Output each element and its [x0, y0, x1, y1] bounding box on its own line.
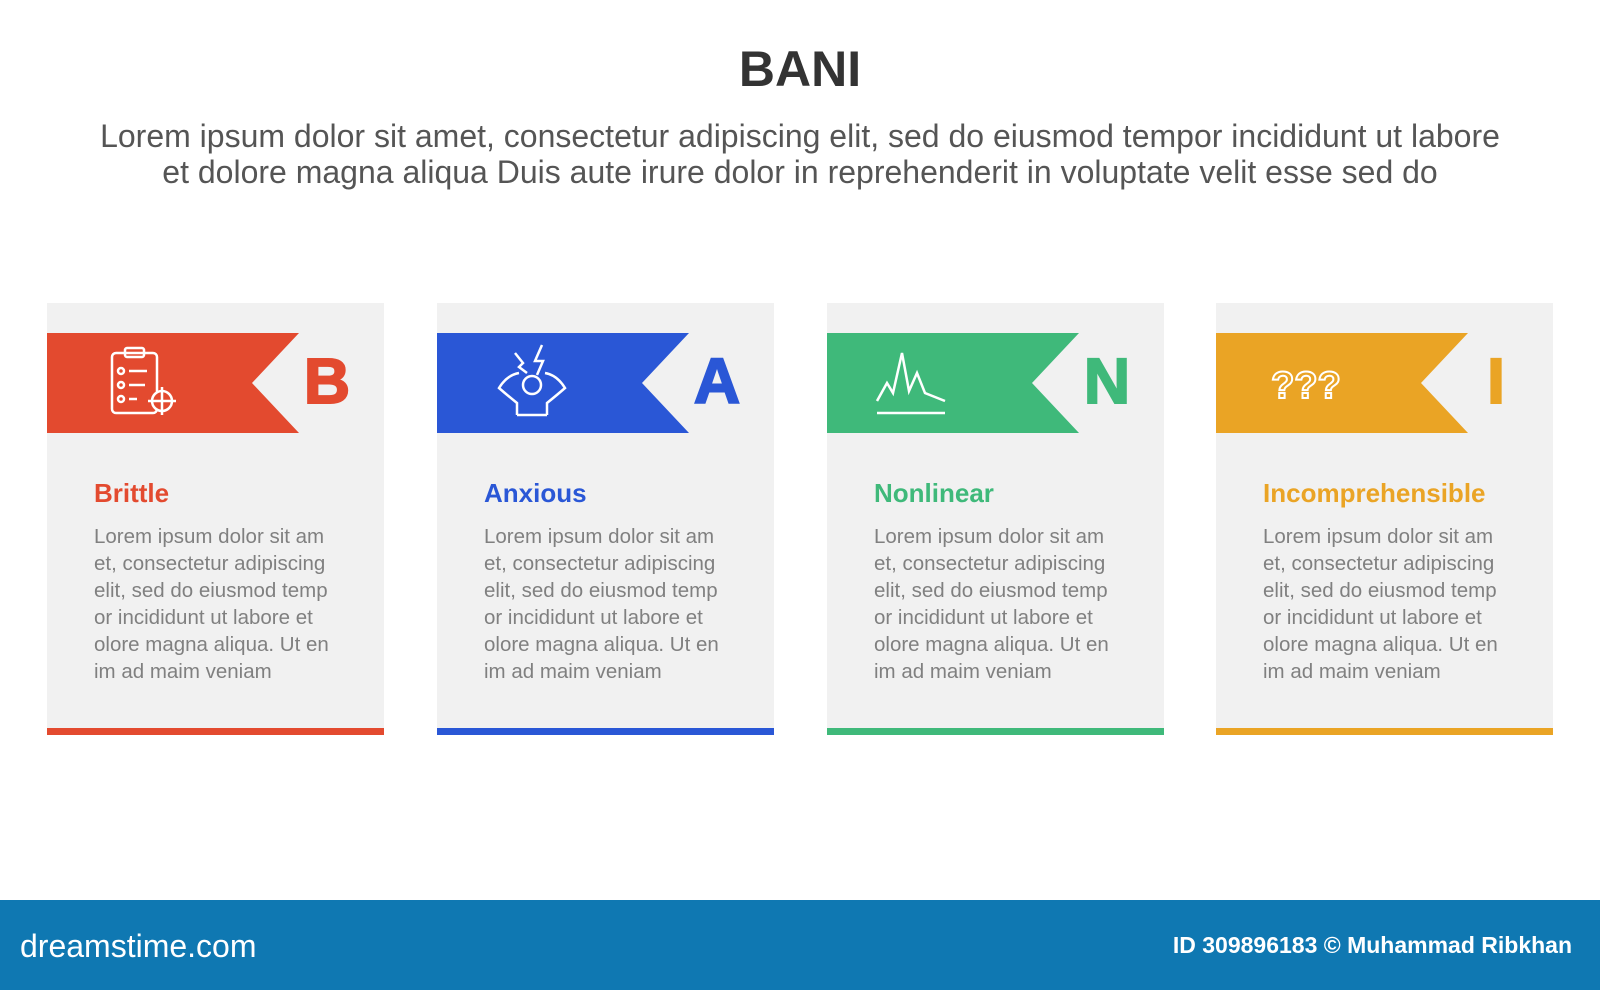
footer logo: dreamstime.com	[20, 928, 256, 964]
subtitle: Lorem ipsum dolor sit amet, consectetur adipiscing elit, sed do eiusmod tempor incididunt ut labore	[100, 118, 1500, 154]
subtitle: et dolore magna aliqua Duis aute irure dolor in reprehenderit in voluptate velit esse sed do	[162, 154, 1438, 190]
panel: incomprehensible	[1216, 303, 1553, 735]
text: elit, sed do eiusmod temp	[94, 579, 328, 602]
text: et, consectetur adipiscing	[874, 552, 1105, 575]
text: Lorem ipsum dolor sit am	[484, 525, 714, 548]
text: im ad maim veniam	[1263, 660, 1441, 683]
ribbon: brittle	[47, 333, 299, 433]
text: olore magna aliqua. Ut en	[874, 633, 1109, 656]
title: BANI	[739, 41, 861, 97]
footer credit: ID 309896183 © Muhammad Ribkhan	[1173, 932, 1572, 958]
letter N: N	[1084, 345, 1130, 417]
text	[94, 525, 329, 683]
text: olore magna aliqua. Ut en	[1263, 633, 1498, 656]
text	[874, 525, 1109, 683]
letter A: A	[694, 345, 740, 417]
text: et, consectetur adipiscing	[1263, 552, 1494, 575]
footer	[0, 900, 1600, 990]
text: olore magna aliqua. Ut en	[484, 633, 719, 656]
ribbon: incomprehensible	[1216, 333, 1468, 433]
text: Lorem ipsum dolor sit am	[94, 525, 324, 548]
text: elit, sed do eiusmod temp	[484, 579, 718, 602]
text: Lorem ipsum dolor sit am	[874, 525, 1104, 548]
letter I: I	[1487, 345, 1505, 417]
text	[484, 525, 719, 683]
letter B: B	[304, 345, 350, 417]
text: et, consectetur adipiscing	[94, 552, 325, 575]
text: elit, sed do eiusmod temp	[1263, 579, 1497, 602]
text: et, consectetur adipiscing	[484, 552, 715, 575]
text: im ad maim veniam	[484, 660, 662, 683]
heading: Anxious	[484, 478, 587, 508]
ribbon: nonlinear	[827, 333, 1079, 433]
text	[1263, 525, 1498, 683]
text: or incididunt ut labore et	[1263, 606, 1482, 629]
text: olore magna aliqua. Ut en	[94, 633, 329, 656]
text: elit, sed do eiusmod temp	[874, 579, 1108, 602]
ribbon: anxious	[437, 333, 689, 433]
text: or incididunt ut labore et	[484, 606, 703, 629]
text: Lorem ipsum dolor sit am	[1263, 525, 1493, 548]
text: im ad maim veniam	[874, 660, 1052, 683]
text: im ad maim veniam	[94, 660, 272, 683]
heading: Incomprehensible	[1263, 478, 1486, 508]
panel: brittle	[47, 303, 384, 735]
text: or incididunt ut labore et	[874, 606, 1093, 629]
heading: Brittle	[94, 478, 169, 508]
panel: anxious	[437, 303, 774, 735]
panel: nonlinear	[827, 303, 1164, 735]
heading: Nonlinear	[874, 478, 994, 508]
ribbon: incomprehensible: ???	[1271, 365, 1341, 407]
subtitle	[100, 118, 1500, 190]
text: or incididunt ut labore et	[94, 606, 313, 629]
